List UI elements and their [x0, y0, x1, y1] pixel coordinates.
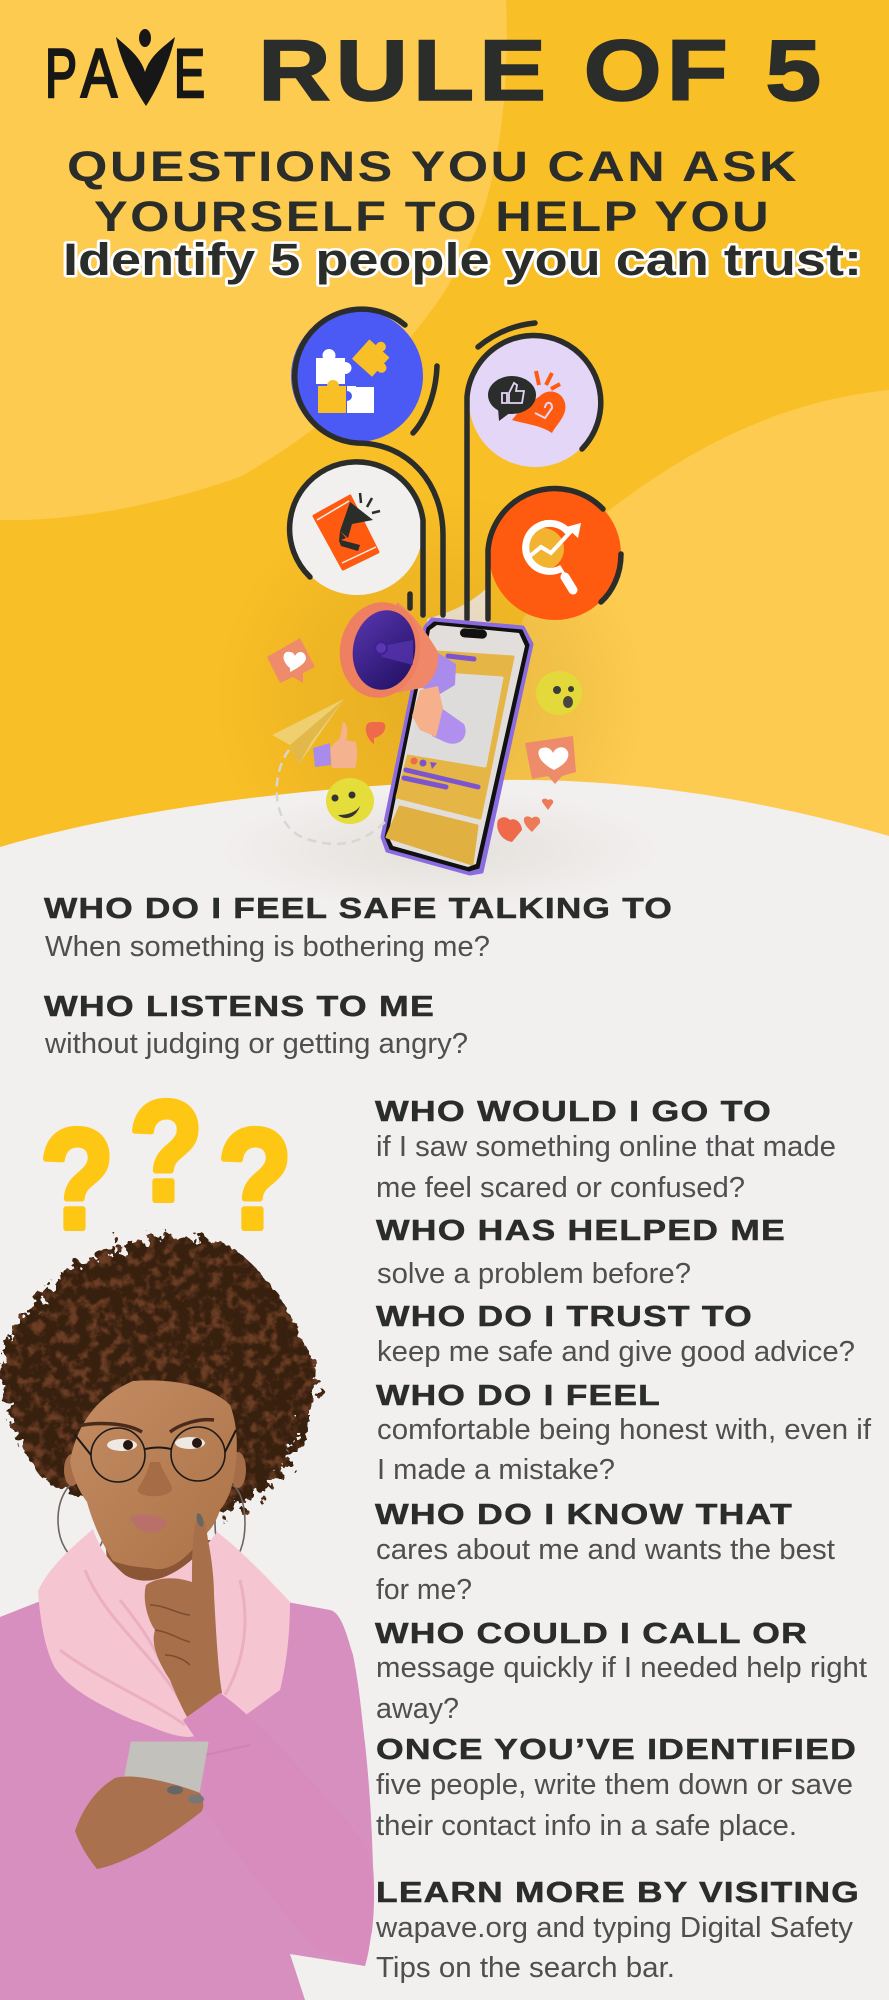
illustration: phone and icons: [267, 309, 621, 874]
text block: right column questions: wapave.org and typing Digital Safety: [375, 1912, 853, 1944]
circle: thumbs up and heart: [467, 323, 601, 619]
text block: right column questions: WHO HAS HELPED ME: [376, 1215, 786, 1247]
circle: puzzle: [291, 309, 443, 615]
subtitle: Identify 5 people you can trust:: [63, 234, 862, 285]
phone: [382, 619, 532, 874]
text block: right column questions: WHO DO I KNOW THAT: [375, 1499, 793, 1531]
text block: right column questions: WHO COULD I CALL OR: [375, 1618, 808, 1650]
question marks: ?: [40, 1100, 114, 1259]
logo: PAVE: A: [81, 35, 117, 112]
text block: right column questions: if I saw something online that made: [376, 1131, 836, 1163]
text block: top questions: When something is bothering me?: [45, 931, 490, 963]
logo: PAVE: E: [174, 35, 205, 112]
text block: right column questions: I made a mistake?: [377, 1454, 615, 1486]
megaphone: [332, 596, 456, 704]
holding hand: [75, 1776, 204, 1869]
question marks: [40, 1072, 292, 1259]
right earring: [215, 1485, 245, 1561]
text block: right column questions: their contact info in a safe place.: [376, 1810, 797, 1842]
text block: right column questions: five people, write them down or save: [376, 1769, 853, 1801]
left earring: [58, 1480, 106, 1560]
woman with phone: [0, 1237, 374, 2000]
text block: right column questions: me feel scared or confused?: [376, 1172, 745, 1204]
hand holding megaphone: [412, 686, 466, 744]
text block: right column questions: cares about me and wants the best: [376, 1534, 835, 1566]
logo: PAVE: P: [45, 35, 77, 112]
text block: right column questions: ONCE YOU’VE IDENTIFIED: [376, 1734, 857, 1766]
text block: right column questions: away?: [376, 1693, 459, 1725]
logo: PAVE: [45, 29, 205, 112]
sleeve: [183, 1693, 374, 1966]
text block: right column questions: [375, 1096, 872, 1984]
text block: top questions: [44, 893, 673, 1060]
text block: right column questions: comfortable being honest with, even if: [377, 1414, 872, 1446]
chin hand: [145, 1512, 222, 1717]
neck: [105, 1540, 225, 1620]
text block: top questions: without judging or getting angry?: [44, 1028, 468, 1060]
face: [64, 1380, 246, 1569]
background: [0, 0, 889, 888]
text block: right column questions: message quickly if I needed help right: [376, 1652, 867, 1684]
hair: [2, 1237, 318, 1515]
text block: right column questions: keep me safe and give good advice?: [377, 1336, 855, 1368]
scarf: [38, 1529, 290, 1737]
subtitle: YOURSELF TO HELP YOU: [94, 193, 771, 241]
social stickers: [267, 638, 582, 844]
text block: top questions: WHO LISTENS TO ME: [44, 991, 435, 1023]
subtitle: QUESTIONS YOU CAN ASK: [67, 143, 799, 191]
subtitle: [63, 143, 862, 285]
text block: right column questions: WHO DO I TRUST TO: [376, 1301, 753, 1333]
sweater: [0, 1602, 374, 2000]
text block: right column questions: for me?: [376, 1574, 472, 1606]
text block: right column questions: LEARN MORE BY VISITING: [376, 1877, 860, 1909]
text block: right column questions: WHO DO I FEEL: [376, 1380, 661, 1412]
text block: right column questions: Tips on the search bar.: [376, 1952, 675, 1984]
circle: target and growth: [488, 488, 621, 620]
text block: right column questions: WHO WOULD I GO TO: [375, 1096, 772, 1128]
text block: top questions: WHO DO I FEEL SAFE TALKING TO: [44, 893, 673, 925]
held phone: [125, 1743, 207, 1793]
question marks: ?: [218, 1100, 292, 1259]
title: RULE OF 5: [258, 23, 826, 119]
text block: right column questions: solve a problem before?: [377, 1258, 691, 1290]
question marks: ?: [129, 1072, 203, 1231]
circle: phone megaphone: [290, 462, 423, 615]
